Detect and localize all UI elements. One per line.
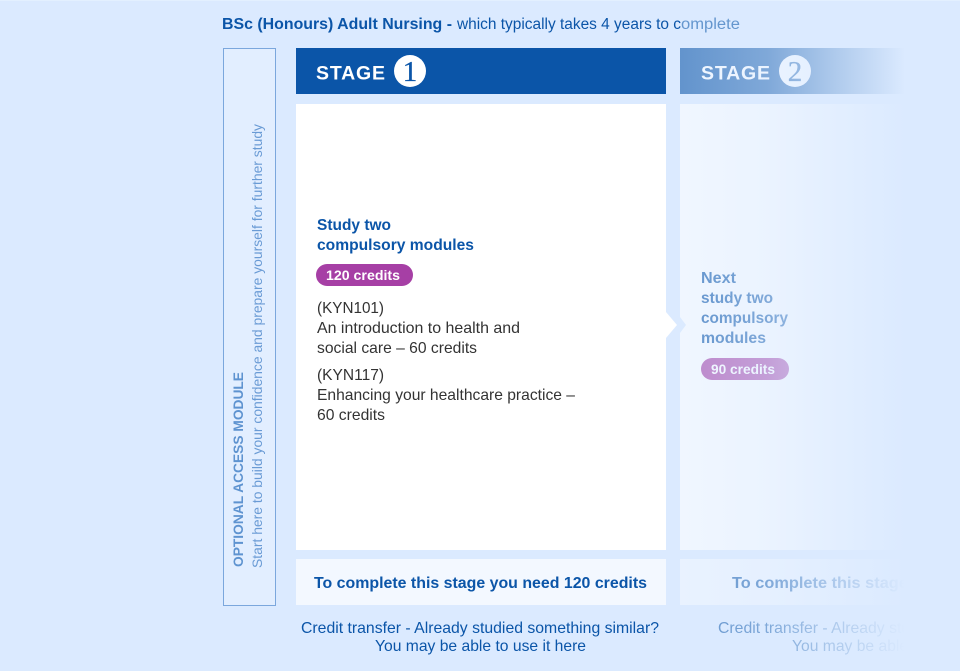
- infographic canvas: [223, 18, 892, 654]
- title: which typically takes 4 years to c: [456, 16, 681, 33]
- access module heading: OPTIONAL ACCESS MODULE: [230, 372, 246, 567]
- title: omplete: [681, 16, 740, 33]
- stage 1 heading: compulsory modules: [317, 237, 474, 254]
- title: [222, 16, 740, 33]
- stage number 1: 1: [403, 56, 417, 88]
- stage 2 content card: [680, 104, 832, 550]
- module KYN117: [317, 367, 575, 424]
- stage 1 header: STAGE: [316, 62, 385, 84]
- module KYN101: (KYN101): [317, 300, 384, 317]
- fade overlay: [680, 40, 905, 671]
- panel: optional access module: [224, 48, 276, 606]
- module KYN101: social care – 60 credits: [317, 340, 477, 357]
- stage 1 heading: [317, 217, 474, 254]
- credits badge: 120: 120 credits: [326, 267, 400, 283]
- stage 2 completion box: [680, 559, 892, 605]
- stage 1 credit transfer note: [301, 620, 659, 655]
- stage 1 content card: [296, 104, 677, 550]
- module KYN117: 60 credits: [317, 407, 385, 424]
- title: BSc (Honours) Adult Nursing -: [222, 16, 452, 33]
- arrow to stage 2: [666, 312, 677, 338]
- credits badge: 120: [316, 264, 413, 286]
- module KYN117: (KYN117): [317, 367, 384, 384]
- stage 2 heading: Next: [701, 270, 736, 287]
- stage number 2: 2: [788, 56, 802, 88]
- module KYN101: An introduction to health and: [317, 320, 520, 337]
- notch: [680, 317, 686, 333]
- stage number 2: [779, 55, 811, 88]
- stage 2 heading: study two: [701, 290, 773, 307]
- stage 1 completion box: To complete this stage you need 120 credits: [314, 575, 647, 592]
- stage 1 credit transfer note: Credit transfer - Already studied something similar?: [301, 620, 659, 637]
- credits badge: 90: 90 credits: [711, 361, 775, 377]
- stage 2 heading: modules: [701, 330, 766, 347]
- stage 2 header: [680, 48, 905, 94]
- stage 1 heading: Study two: [317, 217, 391, 234]
- panel: stage 2 (faded): [680, 48, 892, 654]
- module KYN117: Enhancing your healthcare practice –: [317, 387, 575, 404]
- credits badge: 90: [701, 358, 789, 380]
- module KYN101: [317, 300, 520, 357]
- stage 1 header: [296, 48, 666, 94]
- access module description: Start here to build your confidence and prepare yourself for further study: [249, 124, 265, 568]
- stage 2 heading: [701, 270, 788, 347]
- stage 1 completion box: [296, 559, 666, 605]
- stage 2 credit transfer note: [718, 622, 892, 654]
- stage 2 header: STAGE: [701, 62, 770, 84]
- stage 2 heading: compulsory: [701, 310, 788, 327]
- stage 1 credit transfer note: You may be able to use it here: [375, 638, 586, 655]
- stage number 1: [394, 55, 426, 88]
- panel: stage 1: [296, 48, 677, 655]
